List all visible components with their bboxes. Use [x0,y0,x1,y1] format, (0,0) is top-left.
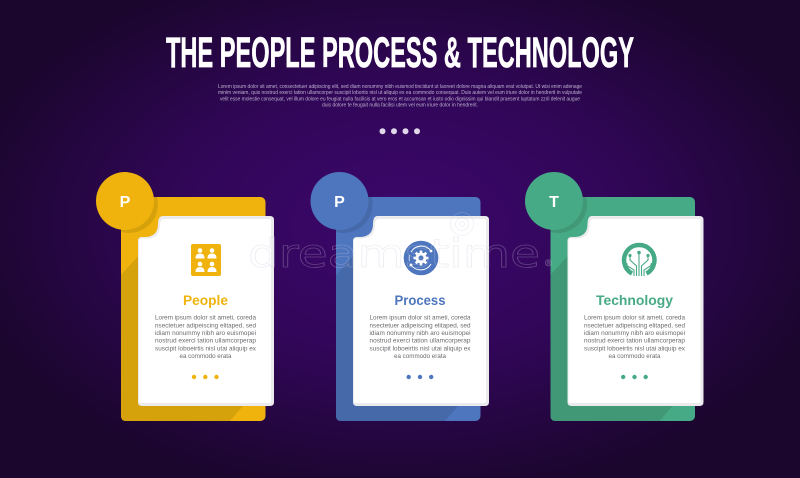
back panel: people [121,197,266,421]
back panel: process [336,197,480,421]
dots: technology [621,375,648,379]
body text: people: Lorem ipsum dolor sit ameti, coreda [155,314,256,322]
icon: people grid [191,244,221,276]
body text: people: suscipit loboeirtis nisl utai aliquip ex [155,345,257,352]
body text: technology: idiam nonummy nibh aro euismopei [584,330,686,337]
watermark [248,212,553,277]
panel: technology [525,172,704,421]
badge: T [525,172,587,233]
body text: technology: ea commodo erata [608,353,661,360]
body text: people: nsectetuer adipeiscing elitaped, sed [155,322,256,329]
intro text block: duis dolore te feugait nulla facilisi utem vel eum iriure dolor in hendrerit. [322,102,478,108]
back panel: technology [550,197,695,421]
body text: technology: Lorem ipsum dolor sit ameti, coreda [584,314,685,322]
dots: process [406,375,433,379]
body text: process [370,314,471,360]
body text: technology: nostrud exerci tation ullamcorperap [584,338,685,345]
body text: process: ea commodo erata [394,353,446,360]
body text: people: ea commodo erata [180,353,232,360]
body text: process: Lorem ipsum dolor sit ameti, coreda [370,314,471,322]
badge: T: T [549,194,559,211]
panel: process [310,172,489,421]
body text: technology: nsectetuer adipeiscing elitaped, sed [584,322,685,329]
heading: technology: Technology [596,293,673,308]
card: people [138,216,274,406]
card: process [353,216,489,406]
badge: P: P [334,194,345,211]
intro text block: velit esse molestie consequat, vel illum dolore eu feugiat nulla facilisis at vero eros et accumsan et iusto odio dignissim qui blandit praesent luptatum zzril delenit augue [220,96,580,102]
heading: people: People [183,293,228,308]
body text: process: suscipit loboeirtis nisl utai aliquip ex [370,345,471,352]
watermark: ® [544,259,553,269]
badge: P: P [120,194,131,211]
badge: P [310,172,372,233]
icon: circuit tree [624,245,654,276]
body text: technology: suscipit loboeirtis nisl utai aliquip ex [584,345,686,352]
intro text block: minim veniam, quis nostrud exerci tation ullamcorper suscipit lobortis nisl ut aliquip ex ea commodo consequat. Duis autem vel eum iriure dolor in hendrerit in vulputate [218,90,582,96]
body text: process: nsectetuer adipeiscing elitaped, sed [370,322,471,329]
watermark: dreamstime [248,232,540,277]
badge: P [96,172,158,233]
body text: people: nostrud exerci tation ullamcorperap [155,338,256,345]
body text: technology [584,314,686,360]
card: technology [568,216,704,406]
heading: process: Process [394,293,446,308]
intro text block: Lorem ipsum dolor sit amet, consectetuer adipiscing elit, sed diam nonummy nibh euismod tincidunt ut laoreet dolore magna aliquam erat volutpat. Ut wisi enim adenage [218,84,582,90]
body text: process: nostrud exerci tation ullamcorperap [370,338,471,345]
header dots [380,128,420,134]
icon: gear cycle [404,241,438,275]
dots: people [192,375,219,379]
body text: process: idiam nonummy nibh aro euismopei [370,330,471,337]
intro text block [218,84,582,108]
body text: people [155,314,257,360]
panel: people [96,172,274,421]
body text: people: idiam nonummy nibh aro euismopei [155,330,257,337]
